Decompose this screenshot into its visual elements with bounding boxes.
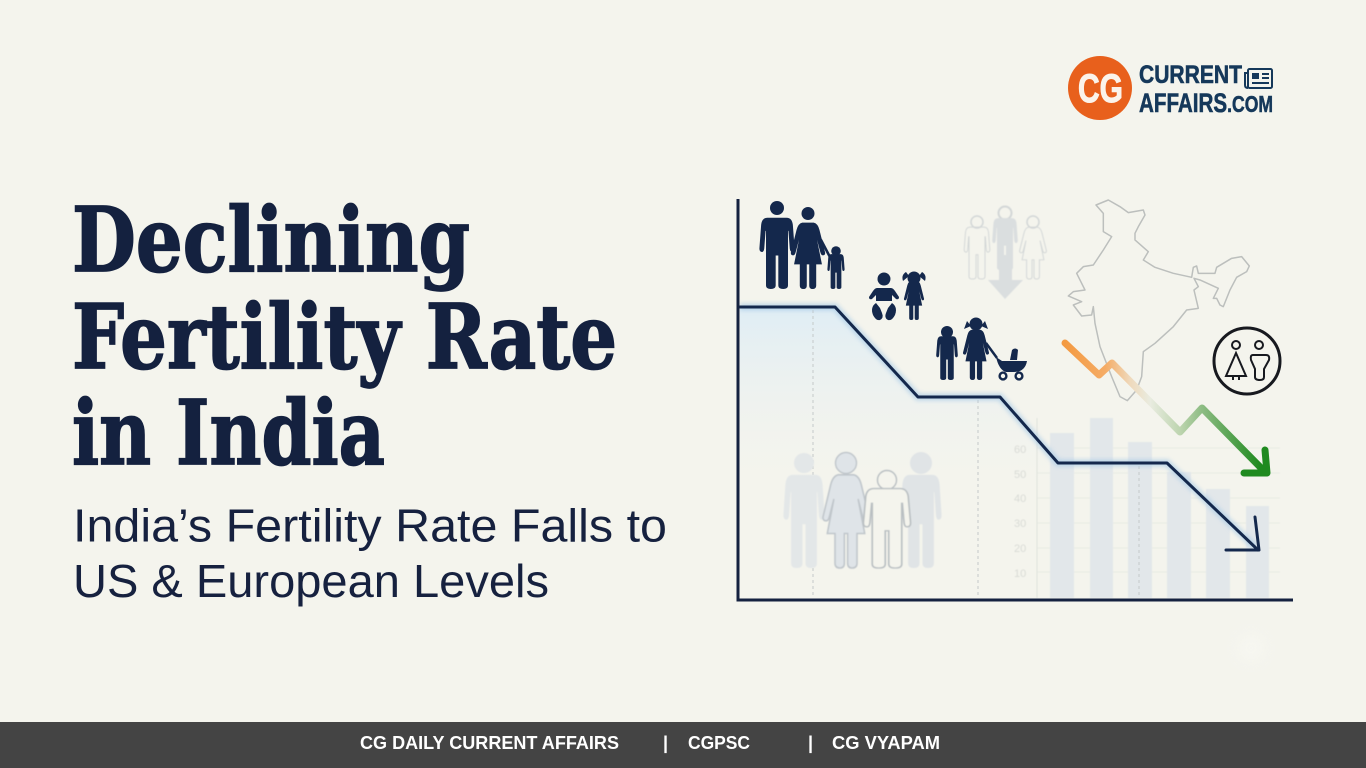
logo badge bbox=[1068, 56, 1132, 120]
background bar chart: 30 bbox=[1014, 518, 1026, 530]
title: Declining bbox=[72, 187, 470, 292]
title: in India bbox=[72, 380, 385, 485]
footer bar: | bbox=[808, 733, 813, 753]
background bar chart: 20 bbox=[1014, 543, 1026, 555]
ghost man left bbox=[783, 453, 825, 568]
footer bar: CG DAILY CURRENT AFFAIRS bbox=[360, 733, 619, 753]
ghost woman bbox=[823, 452, 869, 568]
subtitle: India’s Fertility Rate Falls to bbox=[73, 500, 667, 552]
ghost man right bbox=[900, 452, 942, 568]
icon: baby and girl bbox=[869, 272, 926, 320]
area under line bbox=[740, 307, 1258, 598]
ghost child bbox=[863, 470, 911, 568]
declining line glow bbox=[740, 307, 1255, 547]
footer bar: | bbox=[663, 733, 668, 753]
background bar chart: 10 bbox=[1014, 568, 1026, 580]
background bar chart: 60 bbox=[1014, 444, 1026, 456]
title bbox=[72, 187, 617, 485]
dashed guides bbox=[813, 310, 1139, 598]
multicolour trend arrow bbox=[1065, 343, 1267, 473]
icon: gender symbol badge bbox=[1214, 328, 1280, 394]
footer bar: CG VYAPAM bbox=[832, 733, 940, 753]
declining line bbox=[740, 307, 1259, 550]
background bar chart: 50 bbox=[1014, 469, 1026, 481]
chart: declining fertility staircase bbox=[738, 199, 1293, 600]
icon: family of three bbox=[759, 201, 845, 289]
logo badge: CG bbox=[1078, 67, 1123, 111]
logo: CG Current Affairs bbox=[1068, 56, 1273, 120]
footer bar bbox=[0, 722, 1366, 768]
logo wordmark bbox=[1139, 61, 1273, 118]
background bar chart: 40 bbox=[1014, 493, 1026, 505]
icon: faded population with down arrow bbox=[964, 206, 1046, 299]
logo wordmark: AFFAIRS.COM bbox=[1139, 88, 1273, 118]
logo wordmark: CURRENT bbox=[1139, 61, 1242, 89]
axes bbox=[738, 199, 1293, 600]
title: Fertility Rate bbox=[72, 284, 617, 389]
footer bar: CGPSC bbox=[688, 733, 750, 753]
background bar chart bbox=[1014, 418, 1280, 598]
decorative soft highlight bbox=[1238, 635, 1264, 661]
subtitle: US & European Levels bbox=[73, 555, 549, 607]
subtitle bbox=[73, 500, 667, 607]
ghost family bbox=[783, 452, 942, 568]
map: India outline bbox=[1068, 200, 1249, 401]
icon: newspaper bbox=[1245, 69, 1272, 88]
icon: children with stroller bbox=[936, 318, 1027, 380]
